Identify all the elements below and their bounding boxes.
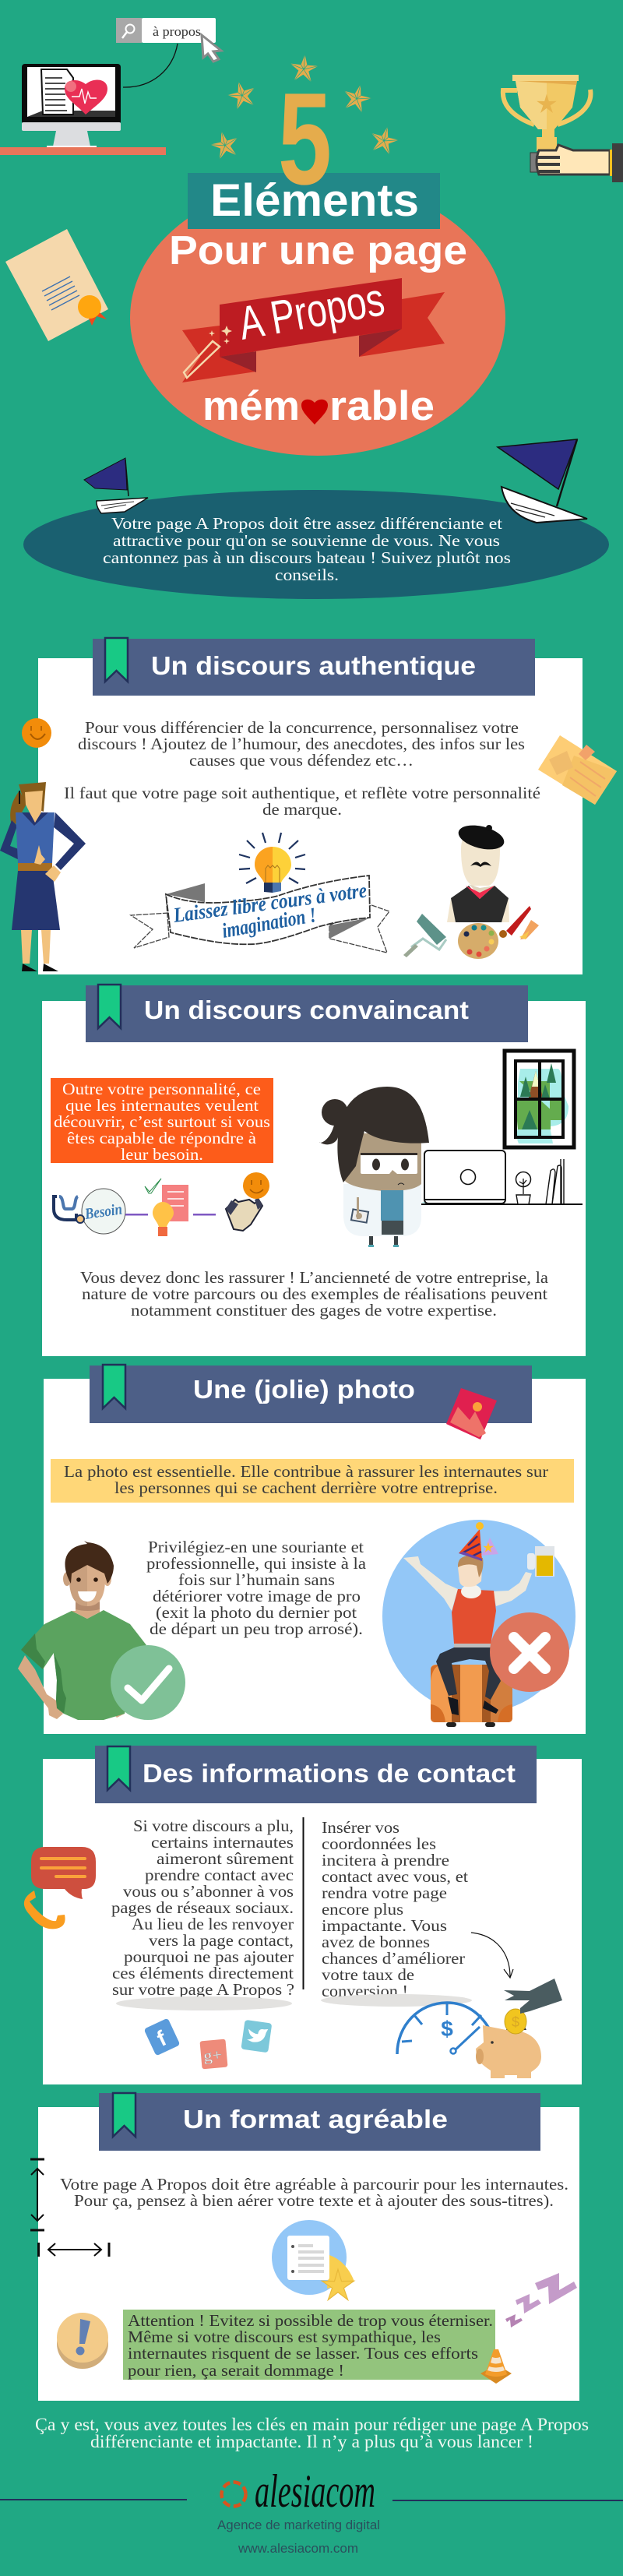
panel heading: Des informations de contact bbox=[143, 1759, 516, 1788]
body text: discours ! Ajoutez de l’humour, des anecdotes, des infos sur les bbox=[78, 735, 525, 753]
yellow callout bbox=[51, 1459, 574, 1503]
icon: check badge bbox=[111, 1645, 185, 1720]
right column text: impactante. Vous bbox=[322, 1916, 447, 1935]
right column text: chances d’améliorer bbox=[322, 1949, 465, 1968]
panel heading: Un format agréable bbox=[183, 2105, 448, 2134]
heading band bbox=[188, 173, 440, 229]
body text: Il faut que votre page soit authentique, et reflète votre personnalité bbox=[64, 784, 540, 802]
body text: nature de votre parcours ou des exemples de réalisations peuvent bbox=[82, 1284, 547, 1303]
panel heading: Une (jolie) photo bbox=[193, 1375, 415, 1404]
window illustration bbox=[505, 1051, 574, 1147]
doctor character bbox=[319, 1087, 438, 1247]
panel heading bbox=[90, 1365, 532, 1423]
footer rule right bbox=[392, 2500, 623, 2501]
panel: Un discours authentique bbox=[0, 638, 617, 974]
stars bbox=[208, 54, 401, 160]
party man character bbox=[403, 1522, 554, 1727]
left column text: vous ou s’abonner à vos bbox=[123, 1882, 294, 1901]
body text: causes que vous défendez etc… bbox=[189, 751, 414, 770]
logo wordmark: alesiacom bbox=[255, 2465, 375, 2517]
right column text: avez de bonnes bbox=[322, 1933, 430, 1951]
left column text: ces éléments directement bbox=[112, 1964, 294, 1982]
green callout: Même si votre discours est sympathique, les bbox=[128, 2328, 441, 2346]
footer rule left bbox=[0, 2499, 187, 2500]
icon: cross badge bbox=[490, 1612, 569, 1692]
left column text: vers la page contact, bbox=[149, 1931, 294, 1950]
title: mémorable bbox=[202, 383, 435, 429]
right column text: encore plus bbox=[322, 1900, 403, 1919]
orange callout: que les internautes veulent bbox=[65, 1096, 259, 1115]
left column text: Si votre discours a plu, bbox=[133, 1817, 294, 1835]
closing text bbox=[35, 2415, 589, 2451]
salmon ellipse bbox=[130, 180, 505, 456]
woman character bbox=[0, 782, 86, 971]
body text bbox=[80, 1268, 549, 1320]
icon flow: besoin: Besoin bbox=[83, 1200, 123, 1223]
left column text: pages de réseaux sociaux. bbox=[111, 1898, 294, 1917]
body text: Pour ça, pensez à bien aérer votre texte et à ajouter des sous-titres). bbox=[74, 2191, 554, 2210]
green callout: internautes risquent de se lasser. Tous ces efforts bbox=[128, 2344, 478, 2363]
icon: document with star bbox=[272, 2220, 354, 2300]
icon: exclamation bbox=[57, 2313, 108, 2369]
sketched ribbon: imagination ! bbox=[220, 903, 318, 943]
green callout bbox=[123, 2310, 495, 2380]
arrow to gauge bbox=[471, 1933, 513, 1978]
body text: de départ un peu trop arrosé). bbox=[150, 1619, 363, 1638]
closing text: Ça y est, vous avez toutes les clés en main pour rédiger une page A Propos bbox=[35, 2415, 589, 2434]
search box bbox=[116, 18, 216, 43]
tagline: Agence de marketing digital bbox=[217, 2518, 380, 2532]
icons: social networks: g+ bbox=[202, 2046, 223, 2065]
right column text: votre taux de bbox=[322, 1965, 414, 1984]
left column text: pourquoi ne pas ajouter bbox=[124, 1947, 294, 1966]
intro ellipse bbox=[23, 490, 609, 599]
ribbon: A Propos: A Propos bbox=[235, 273, 388, 350]
laptop and shelf bbox=[421, 1151, 583, 1204]
sketched ribbon bbox=[131, 876, 389, 953]
panel heading bbox=[99, 2093, 540, 2151]
title: Eléments: Eléments bbox=[210, 175, 419, 226]
gray shadow right bbox=[321, 1994, 472, 2007]
orange callout: découvrir, c’est surtout si vous bbox=[54, 1112, 270, 1131]
intro text bbox=[103, 514, 511, 584]
icon: gauge bbox=[397, 2003, 489, 2054]
right column text: conversion ! bbox=[322, 1982, 408, 2000]
orange callout: Outre votre personnalité, ce bbox=[62, 1080, 261, 1098]
column divider bbox=[302, 1817, 304, 1989]
icon: phone bbox=[24, 1891, 65, 1929]
sketched ribbon: Laissez libre cours à votre bbox=[171, 879, 368, 927]
right column text: contact avec vous, et bbox=[322, 1867, 468, 1886]
right column text: rendra votre page bbox=[322, 1884, 447, 1902]
panel: Un discours convaincant bbox=[42, 985, 586, 1356]
body text: fois sur l’humain sans bbox=[178, 1570, 335, 1589]
icon: piggy bank: $ bbox=[512, 2014, 519, 2030]
blue circle bbox=[382, 1520, 575, 1713]
smiling man character bbox=[18, 1541, 146, 1720]
panel heading bbox=[93, 638, 535, 696]
intro text: conseils. bbox=[275, 566, 339, 584]
title: pour une page: Pour une page bbox=[169, 228, 467, 273]
hero: title area bbox=[0, 18, 623, 599]
icons: social networks bbox=[144, 2018, 272, 2069]
icon: light bulb bbox=[239, 833, 305, 893]
yellow callout: La photo est essentielle. Elle contribue à rassurer les internautes sur bbox=[64, 1462, 548, 1481]
number 5: 5 bbox=[278, 65, 332, 212]
icon: monitor with heart bbox=[22, 64, 121, 147]
body text: Pour vous différencier de la concurrence, personnalisez votre bbox=[85, 718, 519, 737]
icon: zzz bbox=[505, 2273, 577, 2328]
body text bbox=[146, 1538, 367, 1638]
left column text: prendre contact avec bbox=[145, 1866, 294, 1884]
icon: gauge: $ bbox=[441, 2017, 453, 2041]
right column text bbox=[322, 1818, 468, 2000]
body text bbox=[64, 718, 540, 819]
icon: palette and brushes bbox=[458, 906, 539, 959]
icon: chat bubble bbox=[31, 1847, 96, 1899]
icon flow: besoin bbox=[54, 1172, 269, 1236]
ribbon: A Propos bbox=[182, 273, 445, 382]
icon: photo bbox=[446, 1388, 497, 1440]
panel heading: Un discours convaincant bbox=[144, 996, 469, 1024]
body text: professionnelle, qui insiste à la bbox=[146, 1554, 367, 1573]
shelf bbox=[0, 147, 166, 155]
icon: certificate bbox=[5, 229, 108, 341]
yellow callout: les personnes qui se cachent derrière votre entreprise. bbox=[114, 1478, 498, 1497]
green callout: pour rien, ça serait dommage ! bbox=[128, 2361, 344, 2380]
panel: Un format agréable bbox=[30, 2093, 579, 2401]
right column text: coordonnées les bbox=[322, 1834, 436, 1853]
search box: à propos bbox=[153, 24, 201, 39]
right column text: incitera à prendre bbox=[322, 1851, 449, 1869]
artist character bbox=[447, 821, 509, 922]
title: mémorable: rable bbox=[329, 383, 435, 429]
body text: (exit la photo du dernier pot bbox=[156, 1603, 357, 1622]
icon: horizontal spacing arrow bbox=[39, 2243, 109, 2257]
panel: Une (jolie) photo bbox=[18, 1365, 586, 1734]
left column text: certains internautes bbox=[151, 1833, 294, 1852]
body text: notamment constituer des gages de votre expertise. bbox=[131, 1301, 497, 1320]
logo mark bbox=[221, 2482, 246, 2507]
title: mémorable: mém bbox=[202, 383, 300, 429]
icon: large boat bbox=[498, 439, 587, 523]
connector curve bbox=[123, 44, 178, 87]
icons: social networks: f bbox=[153, 2026, 171, 2051]
icon: trophy bbox=[503, 75, 590, 151]
icon: cursor bbox=[202, 35, 221, 62]
left column text: sur votre page A Propos ? bbox=[112, 1980, 294, 1999]
icon: traffic cone bbox=[480, 2349, 512, 2384]
left column text: aimeront sûrement bbox=[157, 1849, 294, 1868]
orange callout bbox=[51, 1078, 273, 1164]
body text bbox=[60, 2175, 568, 2210]
closing text: différenciante et impactante. Il n’y a plus qu’à vous lancer ! bbox=[90, 2432, 533, 2451]
body text: Votre page A Propos doit être agréable à parcourir pour les internautes. bbox=[60, 2175, 568, 2194]
icon: piggy bank bbox=[476, 1979, 562, 2078]
intro text: Votre page A Propos doit être assez différenciante et bbox=[111, 514, 502, 533]
icon: vertical spacing arrow bbox=[30, 2159, 44, 2230]
gray shadow left bbox=[116, 1996, 292, 2010]
icon: paint roller bbox=[403, 914, 446, 957]
icon: folder note bbox=[538, 735, 617, 805]
panel: Des informations de contact bbox=[24, 1746, 582, 2084]
orange callout: leur besoin. bbox=[121, 1145, 203, 1164]
icon: smiley bbox=[22, 718, 51, 748]
panel heading: Un discours authentique bbox=[151, 651, 476, 680]
intro text: attractive pour qu'on se souvienne de vous. Ne vous bbox=[113, 531, 500, 550]
body text: de marque. bbox=[262, 800, 342, 819]
orange callout: êtes capable de répondre à bbox=[67, 1129, 257, 1147]
panel heading bbox=[95, 1746, 537, 1803]
right column text: Insérer vos bbox=[322, 1818, 399, 1837]
left column text bbox=[111, 1817, 294, 1999]
green callout: Attention ! Evitez si possible de trop vous éterniser. bbox=[128, 2311, 493, 2330]
icon: hand holding trophy bbox=[530, 143, 623, 182]
website url: www.alesiacom.com bbox=[238, 2541, 358, 2556]
icon: small boat bbox=[84, 458, 148, 513]
body text: Privilégiez-en une souriante et bbox=[148, 1538, 364, 1556]
panel heading bbox=[86, 985, 528, 1042]
body text: Vous devez donc les rassurer ! L’ancienneté de votre entreprise, la bbox=[80, 1268, 549, 1287]
left column text: Au lieu de les renvoyer bbox=[132, 1915, 294, 1933]
body text: détériorer votre image de pro bbox=[153, 1587, 361, 1605]
intro text: cantonnez pas à un discours bateau ! Suivez plutôt nos bbox=[103, 548, 511, 567]
